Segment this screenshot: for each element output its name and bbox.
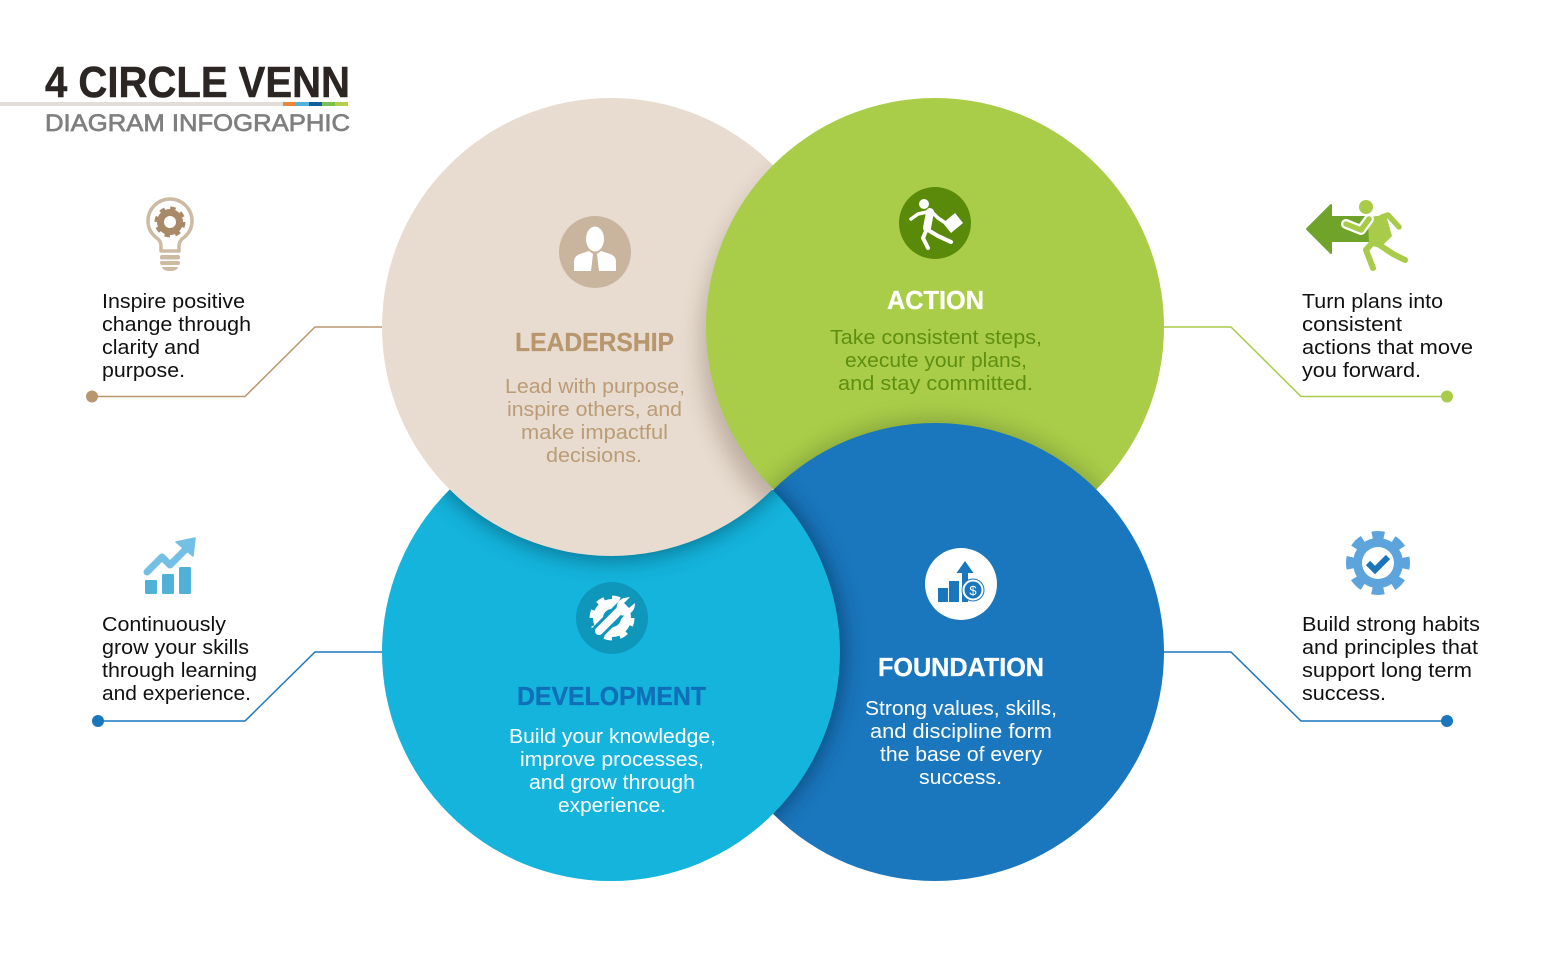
text: right bottom description: support long term bbox=[1302, 659, 1472, 682]
text: right bottom description: and principles that bbox=[1302, 636, 1478, 659]
icon: lightbulb with gear bbox=[148, 199, 192, 271]
connector: leadership bbox=[86, 327, 382, 402]
text: leadership body: make impactful bbox=[521, 421, 668, 444]
text: foundation body bbox=[865, 697, 1057, 789]
title block bbox=[0, 58, 350, 137]
shadow: action on leadership bbox=[692, 170, 773, 506]
text: left bottom description bbox=[102, 613, 257, 705]
circle: leadership bbox=[382, 98, 840, 556]
icon: running person with arrow bbox=[1307, 200, 1405, 268]
connector: action bbox=[1164, 327, 1453, 402]
heading: foundation: FOUNDATION bbox=[878, 652, 1044, 682]
text: left bottom description: grow your skills bbox=[102, 636, 249, 659]
text: foundation body: Strong values, skills, bbox=[865, 697, 1057, 720]
text: left top description: change through bbox=[102, 313, 251, 336]
text: action body bbox=[830, 326, 1042, 395]
text: right top description: consistent bbox=[1302, 313, 1402, 336]
circle: development bbox=[382, 490, 840, 881]
connector: foundation bbox=[1164, 652, 1453, 727]
text: left bottom description: and experience. bbox=[102, 682, 251, 705]
shadow: leadership on development bbox=[440, 490, 782, 573]
text: development body: Build your knowledge, bbox=[509, 725, 716, 748]
text: development body: improve processes, bbox=[520, 748, 704, 771]
text: action body: Take consistent steps, bbox=[830, 326, 1042, 349]
circle: action bbox=[706, 98, 1164, 556]
text: leadership body bbox=[505, 375, 685, 467]
text: right top description: actions that move bbox=[1302, 336, 1473, 359]
title rule bbox=[0, 102, 348, 106]
icon: tools gear badge bbox=[576, 582, 648, 654]
text: left bottom description: through learning bbox=[102, 659, 257, 682]
text: leadership body: inspire others, and bbox=[507, 398, 682, 421]
text: right bottom description bbox=[1302, 613, 1480, 705]
heading: leadership: LEADERSHIP bbox=[515, 327, 674, 357]
icon: person badge bbox=[559, 216, 631, 288]
text: action body: execute your plans, bbox=[845, 349, 1027, 372]
text: left top description: clarity and bbox=[102, 336, 200, 359]
text: leadership body: Lead with purpose, bbox=[505, 375, 685, 398]
text: foundation body: success. bbox=[919, 766, 1002, 789]
text: right top description bbox=[1302, 290, 1473, 382]
text: foundation body: and discipline form bbox=[870, 720, 1052, 743]
heading: development: DEVELOPMENT bbox=[517, 681, 706, 711]
text: left bottom description: Continuously bbox=[102, 613, 227, 636]
icon: growth chart bbox=[145, 538, 195, 594]
text: right bottom description: success. bbox=[1302, 682, 1386, 705]
text: development body: and grow through bbox=[529, 771, 695, 794]
connector: development bbox=[92, 652, 382, 727]
heading: action: ACTION bbox=[887, 285, 984, 315]
icon: growth money badge bbox=[925, 548, 997, 620]
icon: growth money badge: $ bbox=[969, 583, 977, 598]
shadow: development on foundation bbox=[773, 480, 856, 824]
text: development body bbox=[509, 725, 716, 817]
text: foundation body: the base of every bbox=[880, 743, 1043, 766]
text: leadership body: decisions. bbox=[546, 444, 642, 467]
text: development body: experience. bbox=[558, 794, 666, 817]
venn diagram circles bbox=[382, 98, 1164, 881]
icon: gear with checkmark bbox=[1351, 536, 1405, 590]
text: left top description: Inspire positive bbox=[102, 290, 245, 313]
text: right bottom description: Build strong habits bbox=[1302, 613, 1480, 636]
shadow: foundation on action bbox=[766, 410, 1104, 490]
text: left top description: purpose. bbox=[102, 359, 185, 382]
subtitle: DIAGRAM INFOGRAPHIC bbox=[45, 110, 350, 137]
icon: running businessman badge bbox=[899, 187, 971, 259]
text: left top description bbox=[102, 290, 251, 382]
title: 4 CIRCLE VENN bbox=[45, 58, 350, 107]
text: action body: and stay committed. bbox=[838, 372, 1033, 395]
text: right top description: Turn plans into bbox=[1302, 290, 1443, 313]
circle: foundation bbox=[706, 423, 1164, 881]
text: right top description: you forward. bbox=[1302, 359, 1421, 382]
